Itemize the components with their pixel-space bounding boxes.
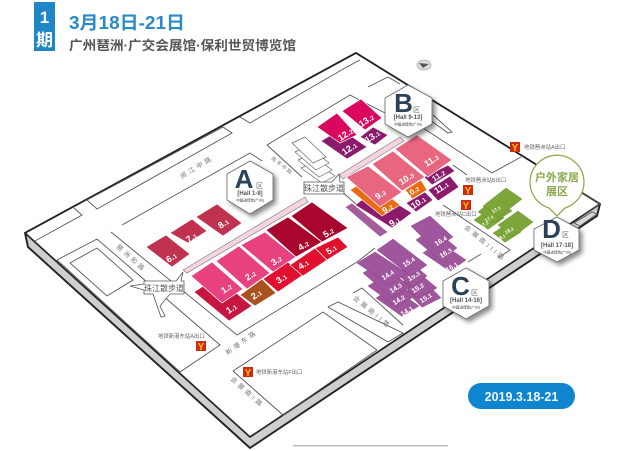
walkway B xyxy=(339,137,404,179)
hall 9.2: 9.2 xyxy=(380,201,395,216)
title: dates: 3月18日-21日 xyxy=(69,13,185,33)
hall 11.2 xyxy=(424,165,455,185)
hall 10.2: 10.2 xyxy=(404,184,422,200)
header badge: phase 1 xyxy=(34,2,55,51)
hex badge: zone C: [Hall 14-16] xyxy=(450,298,482,304)
hall 5.1 xyxy=(315,237,348,260)
hall 2.1 xyxy=(240,279,276,306)
hall 14.4: 14.4 xyxy=(381,269,396,282)
hall 5.2: 5.2 xyxy=(321,225,336,240)
hall 18.1: 18.1 xyxy=(496,233,508,243)
road label: yuejiang middle road: 阅江中路 xyxy=(178,153,215,181)
subway exit icon: Xingang East A xyxy=(196,341,206,353)
road label: exhibition south road 2: 会展南II路 xyxy=(351,293,394,331)
light purple strip hall xyxy=(345,203,388,237)
hall 9.2 xyxy=(350,179,400,216)
subway exit icon: Xingang East F: Y xyxy=(245,368,252,379)
hall 6.1 xyxy=(146,235,190,267)
hex badge: zone A: 区 xyxy=(256,182,263,190)
subway label: Xingang East A: 地铁新港东站A出口 xyxy=(158,332,205,340)
subway exit icon: Pazhou C: Y xyxy=(463,201,470,212)
hall 1.2: 1.2 xyxy=(219,281,234,296)
hex badge: zone B: 中国进博会(广州) xyxy=(394,122,422,126)
hall 6.1: 6.1 xyxy=(164,250,179,265)
hex badge: zone A xyxy=(227,161,273,214)
hall 8.1 xyxy=(196,204,242,236)
hall 5.1: 5.1 xyxy=(324,242,339,257)
hall 10.1: 10.1 xyxy=(409,194,428,211)
header badge: phase 1: 期 xyxy=(36,31,53,50)
subway exit icon: Pazhou A: Y xyxy=(512,143,519,154)
hex badge: zone B xyxy=(385,85,432,137)
road label: xingang east road: 新港东路 xyxy=(224,327,260,357)
stacked low buildings near zone B xyxy=(292,137,335,183)
hall 3.1 xyxy=(263,262,303,292)
hall 10.3 xyxy=(372,151,425,191)
road label: exhibition south road 3: 会展南III路 xyxy=(463,223,509,263)
green bubble: outdoor home zone: 展区 xyxy=(546,185,568,198)
hex badge: zone C xyxy=(443,268,489,319)
road label: exhibition south road 1: 会展南I路 xyxy=(229,374,267,410)
hex badge: zone C: C xyxy=(451,271,470,301)
zone A halls xyxy=(146,202,348,321)
hall 10.1 xyxy=(406,192,433,212)
hall 14.1: 14.1 xyxy=(400,305,415,318)
hall 2.1: 2.1 xyxy=(249,287,264,302)
hall 4.1: 4.1 xyxy=(296,257,311,272)
hex badge: zone D xyxy=(534,214,579,262)
hex badge: zone D: D xyxy=(542,214,561,244)
hall 11.2: 11.2 xyxy=(430,168,448,183)
hall 13.1 xyxy=(360,127,388,145)
hall 3.1: 3.1 xyxy=(274,271,289,286)
zone D halls xyxy=(473,188,533,243)
hall 2.2: 2.2 xyxy=(243,268,258,283)
subway exit icon: Xingang East F xyxy=(243,367,253,379)
hall 4.2 xyxy=(266,217,322,257)
hall 16.4: 16.4 xyxy=(434,235,449,248)
hall 1.1 xyxy=(194,277,252,321)
subtitle: venue: 广州琶洲·广交会展馆·保利世贸博览馆 xyxy=(69,38,296,53)
hall 1.1: 1.1 xyxy=(224,301,239,316)
hall 5.2 xyxy=(291,202,348,242)
hall 14.3: 14.3 xyxy=(389,282,404,295)
date pill xyxy=(468,383,575,409)
green bubble: outdoor home zone xyxy=(530,155,584,216)
hall 9.1: 9.1 xyxy=(387,214,402,229)
hall 4.1 xyxy=(290,248,327,276)
hex badge: zone D: [Hall 17-18] xyxy=(541,243,573,249)
hall 3.2 xyxy=(241,232,296,272)
map base plate xyxy=(25,53,600,448)
hall 12.2: 12.2 xyxy=(336,126,355,143)
subway exit icon: Pazhou A xyxy=(510,142,520,154)
subway label: Pazhou B: 地铁琶洲站B出口 xyxy=(465,176,506,184)
hall 9.1 xyxy=(355,190,412,229)
hex badge: zone D: 中国进博会(广州) xyxy=(543,250,571,254)
hall 12.1: 12.1 xyxy=(340,140,359,157)
subway exit icon: Pazhou B: Y xyxy=(465,186,472,197)
hall 15.2: 15.2 xyxy=(411,282,426,295)
hall 15.1: 15.1 xyxy=(419,292,434,305)
hall 16.3: 16.3 xyxy=(439,247,454,260)
zone C halls xyxy=(357,216,467,318)
callout: walkway east xyxy=(304,174,344,194)
road label: nanfeng road: 南丰中路 xyxy=(270,155,294,177)
hall 11.1: 11.1 xyxy=(432,179,451,196)
subway label: Pazhou C: 地铁琶洲站C出口 xyxy=(435,210,477,218)
hex badge: zone C: 中国进博会(广州) xyxy=(452,304,480,310)
hex badge: zone B: [Hall 9-13] xyxy=(394,115,422,121)
hall 17.2: 17.2 xyxy=(484,214,496,224)
hall 17.3: 17.3 xyxy=(491,205,503,215)
subway label: Xingang East F: 地铁新港东站F出口 xyxy=(256,368,302,376)
hall 2.2 xyxy=(216,246,270,289)
subway exit icon: Pazhou B xyxy=(463,185,473,197)
hex badge: zone D: 区 xyxy=(562,231,569,239)
hall 12.1 xyxy=(321,129,367,159)
hall 9.3 xyxy=(346,166,402,207)
hall 11.3: 11.3 xyxy=(422,152,441,169)
road label: pazhou he road: 琶洲和路 xyxy=(115,242,149,274)
hall 13.1: 13.1 xyxy=(363,128,382,145)
subway exit icon: Xingang East A: Y xyxy=(198,342,205,353)
hall 7.1 xyxy=(170,219,207,245)
hall 15.4: 15.4 xyxy=(402,256,417,269)
hex badge: zone A: A xyxy=(235,164,254,194)
hall 11.3 xyxy=(395,135,452,177)
hall 15.3: 15.3 xyxy=(407,270,422,283)
hex badge: zone A: [Hall 1-8] xyxy=(237,191,263,197)
hall 17.1: 17.1 xyxy=(479,220,491,230)
hall 3.2: 3.2 xyxy=(269,253,284,268)
callout: walkway west: 珠江散步道 xyxy=(144,283,184,293)
bottom rule xyxy=(293,445,448,446)
hall 13.2 xyxy=(342,99,382,130)
header badge: phase 1: 1 xyxy=(40,8,49,27)
subway exit icon: Pazhou C xyxy=(461,200,471,212)
compass icon xyxy=(417,60,431,70)
hall 14.2: 14.2 xyxy=(392,294,407,307)
hall 1.2 xyxy=(191,262,243,303)
hex badge: zone C: 区 xyxy=(471,289,478,297)
hall 7.1: 7.1 xyxy=(184,230,199,245)
subway label: Pazhou A: 地铁琶洲站A出口 xyxy=(524,143,565,151)
callout: walkway west xyxy=(130,272,184,317)
hall 10.3: 10.3 xyxy=(397,170,416,187)
hall 4.2: 4.2 xyxy=(296,238,311,253)
green bubble: outdoor home zone: 户外家居 xyxy=(535,170,579,184)
callout: walkway east: 珠江散步道 xyxy=(304,183,344,193)
hall 10.2 xyxy=(404,180,427,200)
hall 18.2: 18.2 xyxy=(504,226,516,236)
hall 12.2 xyxy=(317,113,357,143)
hex badge: zone B: 区 xyxy=(413,106,420,114)
hall 8.1: 8.1 xyxy=(216,216,231,231)
zone B halls xyxy=(317,99,459,237)
walkway A xyxy=(183,197,308,273)
hall 16.1: 16.1 xyxy=(445,261,460,274)
hall 11.1 xyxy=(428,176,459,201)
hex badge: zone B: B xyxy=(394,88,413,118)
hall 9.3: 9.3 xyxy=(373,187,388,202)
hall 13.2: 13.2 xyxy=(357,112,376,129)
date pill: 2019.3.18-21 xyxy=(485,390,558,404)
road and block outlines xyxy=(35,60,600,415)
hex badge: zone A: 中国进博会(广州) xyxy=(236,198,264,202)
